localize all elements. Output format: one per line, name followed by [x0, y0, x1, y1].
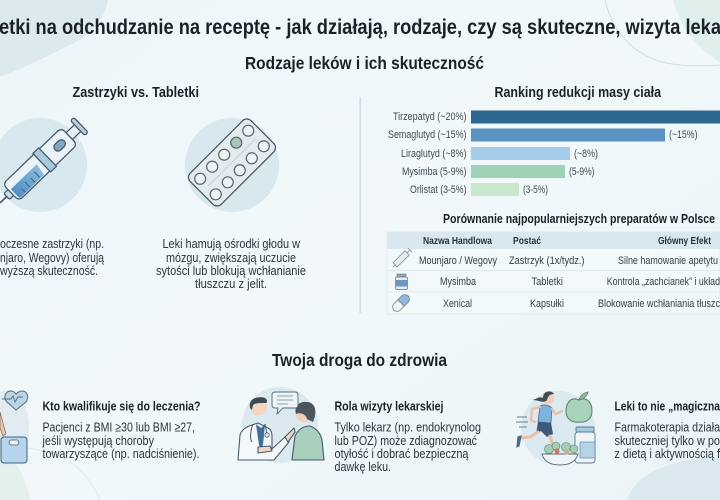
text: tablets description [156, 236, 306, 291]
icon: pill bottle [396, 274, 408, 290]
text: injections description: wyższą skuteczność. [0, 263, 98, 278]
text: tablets description: sytości lub blokują wchłanianie [156, 263, 306, 278]
text: tablets description: tłuszczu z jelit. [195, 276, 267, 291]
bar chart [388, 110, 720, 196]
icon: injection pen [0, 116, 90, 212]
panel: who qualifies [0, 390, 201, 466]
heading: drug types: Rodzaje leków i ich skuteczność [245, 53, 484, 73]
icon: small syringe [391, 248, 412, 269]
heading: your path to health: Twoja droga do zdrowia [272, 350, 447, 370]
heading: injections vs tablets: Zastrzyki vs. Tabletki [72, 85, 199, 101]
text: role of doctor visit: otyłość i dobrać bezpieczną [334, 446, 469, 461]
text: role of doctor visit: lub POZ) może zdiagnozować [334, 433, 477, 448]
text: who qualifies: towarzyszące (np. nadciśnienie). [42, 446, 200, 461]
panel: injections vs tablets [0, 85, 306, 291]
bar chart: Mysimba (5-9%) [402, 166, 466, 178]
icon: heart, arm and scale [0, 390, 29, 466]
bar chart: (~8%) [574, 148, 598, 160]
table header [423, 236, 711, 247]
panel: weight reduction ranking [388, 84, 720, 196]
text: role of doctor visit: Rola wizyty lekarskiej [334, 398, 444, 414]
text: who qualifies: jeśli występują choroby [42, 433, 154, 448]
bar chart: (5-9%) [569, 166, 594, 178]
icon: capsule [391, 293, 411, 313]
table header: Postać [513, 236, 541, 247]
text: role of doctor visit: Tylko lekarz (np. endokrynolog [334, 420, 481, 434]
table row: Xenical: Xenical [443, 298, 472, 310]
table row: Mounjaro / Wegovy: Mounjaro / Wegovy [419, 255, 497, 267]
text: who qualifies: Pacjenci z BMI ≥30 lub BMI ≥27, [42, 420, 195, 434]
table row: Mounjaro / Wegovy [391, 248, 718, 269]
table row: Xenical [391, 293, 720, 313]
text: who qualifies [42, 398, 201, 461]
table header: Nazwa Handlowa [423, 236, 492, 247]
bar chart: Liraglutyd (~8%) [401, 148, 466, 160]
panel: comparison table [387, 212, 720, 314]
text: not a magic pill [614, 398, 720, 461]
bar chart: (~15%) [669, 129, 698, 141]
table row: Mysimba: Mysimba [440, 276, 476, 288]
table row: Mounjaro / Wegovy: Zastrzyk (1x/tydz.) [509, 255, 584, 267]
text: who qualifies: Kto kwalifikuje się do leczenia? [42, 398, 201, 414]
bar chart: Semaglutyd (~15%) [388, 129, 466, 141]
text: injections description: oczesne zastrzyki (np. [0, 236, 104, 251]
table row: Mysimba [396, 274, 720, 290]
text: role of doctor visit: dawkę leku. [334, 459, 391, 474]
text: tablets description: Leki hamują ośrodki głodu w [162, 236, 301, 251]
bar chart: Tirzepatyd (~20%) [393, 111, 466, 123]
icon: runner, apple, salad and bottle [516, 391, 595, 465]
text: tablets description: mózgu, zwiększają uczucie [166, 250, 296, 265]
table row: Xenical: Kapsułki [530, 298, 564, 310]
text: injections description: njaro, Wegovy) oferują [0, 250, 105, 265]
bar chart: Orlistat (3-5%) [410, 184, 466, 196]
bar chart: (3-5%) [523, 184, 548, 196]
icon: doctor and patient [238, 387, 324, 463]
heading: ranking: Ranking redukcji masy ciała [494, 84, 661, 101]
panel: role of doctor visit [238, 387, 481, 474]
text: injections description [0, 236, 105, 278]
icon: blister pack [185, 117, 279, 212]
table row: Mysimba: Tabletki [532, 276, 563, 288]
panel: not a magic pill [516, 391, 720, 465]
text: role of doctor visit [334, 398, 481, 474]
